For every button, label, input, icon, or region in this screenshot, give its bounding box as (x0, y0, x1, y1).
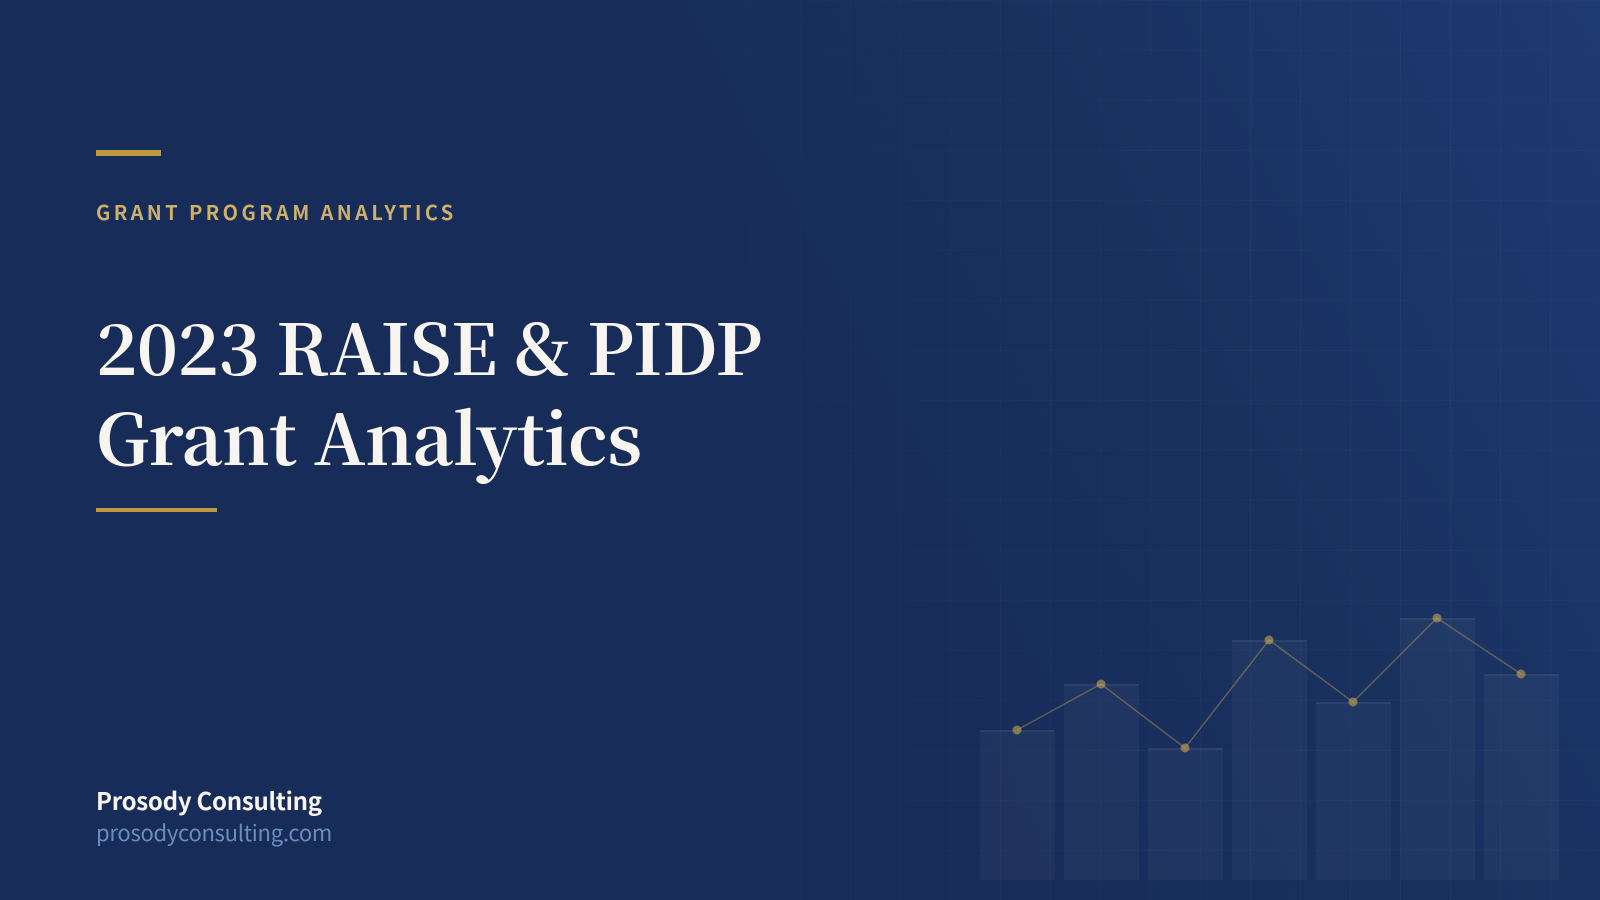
bar top edges (980, 618, 1559, 750)
decorative chart: bars and trend line (980, 614, 1559, 752)
data points (1012, 614, 1526, 752)
title: 2023 RAISE & PIDP (96, 295, 762, 396)
company name: Prosody Consulting (96, 782, 322, 817)
title: Grant Analytics (96, 385, 642, 486)
title underline (96, 508, 217, 512)
trend line (1017, 618, 1521, 748)
title (96, 295, 762, 486)
bars (980, 618, 1559, 880)
eyebrow label: GRANT PROGRAM ANALYTICS (96, 197, 457, 226)
company website: prosodyconsulting.com (96, 816, 332, 848)
top accent bar (96, 150, 161, 156)
